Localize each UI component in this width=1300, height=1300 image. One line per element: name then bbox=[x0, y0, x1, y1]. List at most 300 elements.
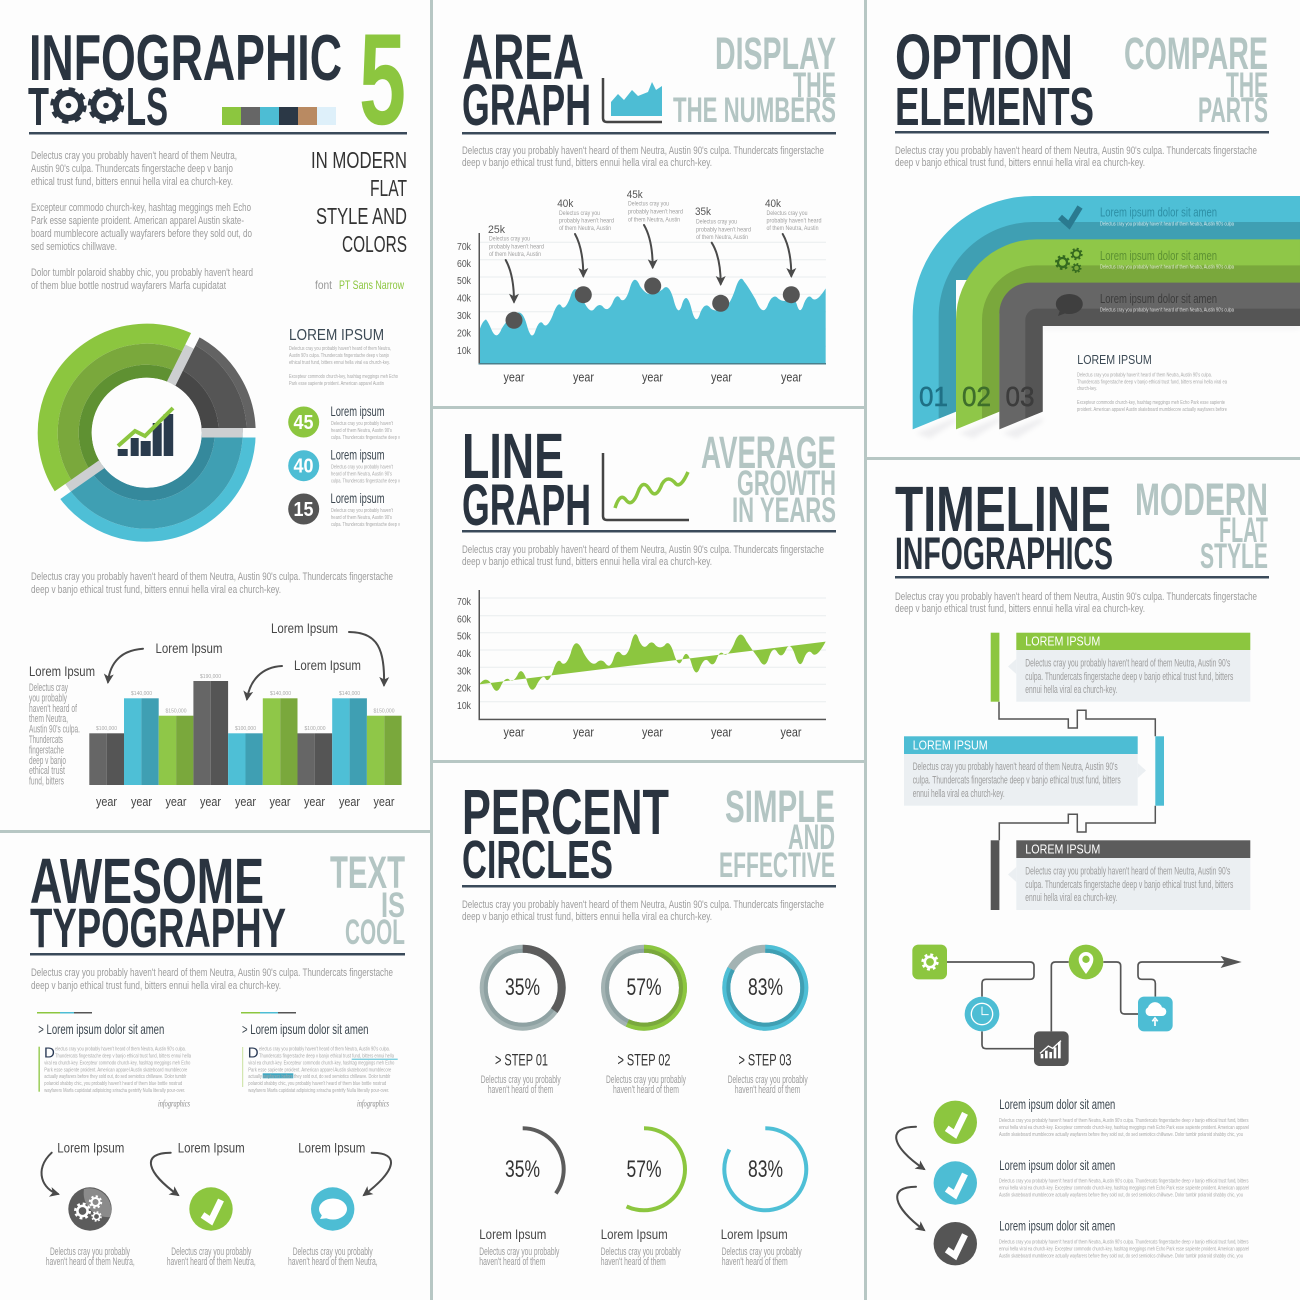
stat 45: heard of them Neutra, Austin 90's bbox=[331, 428, 392, 434]
bar chart: $100,000 bbox=[235, 726, 256, 732]
title: area graph bbox=[462, 21, 591, 138]
callout: speech bubble bbox=[288, 1140, 391, 1268]
chart axis labels: 20k bbox=[457, 328, 472, 340]
step 03: haven't heard of them bbox=[735, 1084, 800, 1096]
ribbon option 1: Lorem ipsum dolor sit amen bbox=[1100, 205, 1217, 220]
bar chart note: ethical trust bbox=[29, 765, 65, 777]
marker 40k: 40k bbox=[765, 198, 781, 210]
ribbon option 2 bbox=[962, 248, 1234, 412]
arc 35 percent: 35% bbox=[505, 1156, 540, 1183]
marker 40k: probably haven't heard bbox=[559, 218, 614, 224]
bar chart note: haven't heard of bbox=[29, 703, 78, 715]
intro text: of them blue bottle nostrud wayfarers Marfa cupidatat bbox=[31, 280, 226, 292]
bar chart: year bbox=[96, 794, 118, 809]
chart axis labels: year bbox=[711, 724, 733, 740]
subtitle: average growth: IN YEARS bbox=[732, 491, 836, 530]
marker 45k: 45k bbox=[627, 189, 643, 201]
donut text block: LOREM IPSUM bbox=[289, 327, 384, 344]
ring 83 percent bbox=[726, 949, 804, 1027]
intro text: Excepteur commodo church-key, hashtag meggings meh Echo bbox=[31, 202, 251, 214]
marker 40k bbox=[557, 198, 614, 303]
side heading: IN MODERN bbox=[311, 147, 407, 173]
subtitle: average growth: AVERAGE bbox=[701, 427, 836, 478]
step 01: haven't heard of them bbox=[488, 1084, 553, 1096]
timeline box 2 bbox=[904, 736, 1164, 806]
chart axis labels: 10k bbox=[457, 346, 472, 357]
ribbon text block: Thundercats fingerstache deep v banjo ethical trust fund, bitters ennui hella viral ea bbox=[1077, 380, 1228, 386]
chart axis labels: year bbox=[711, 370, 733, 384]
callout: gears bbox=[42, 1140, 135, 1268]
paragraph bbox=[462, 145, 824, 169]
paragraph: deep v banjo ethical trust fund, bitters ennui hella viral ea church-key. bbox=[462, 157, 712, 169]
paragraph: Delectus cray you probably haven't heard of them Neutra, Austin 90's culpa. Thundercats fingerstache bbox=[31, 967, 393, 979]
donut text block: Austin 90's culpa. Thundercats fingerstache deep v banjo bbox=[289, 353, 389, 359]
article column 2: electus cray you probably haven't heard of them Neutra, Austin 90's culpa. bbox=[259, 1047, 390, 1053]
callout: check bbox=[151, 1140, 256, 1268]
subtitle: text is cool: COOL bbox=[345, 913, 405, 952]
article column 1: viral ea church-key. Excepteur commodo church-key, hashtag meggings meh Echo bbox=[44, 1060, 190, 1066]
callout: gears: Lorem Ipsum bbox=[57, 1140, 124, 1156]
title: infographic tools 5: LS bbox=[126, 77, 168, 137]
marker 25k: 25k bbox=[488, 224, 505, 236]
stat 45: 45 bbox=[294, 412, 314, 434]
chart axis labels: 70k bbox=[457, 597, 472, 608]
stat 15: culpa. Thundercats fingerstache deep v bbox=[331, 522, 400, 528]
subtitle: simple and effective: SIMPLE bbox=[725, 781, 835, 832]
caption 3 bbox=[721, 1226, 802, 1268]
checklist item 3: Lorem ipsum dolor sit amen bbox=[999, 1218, 1115, 1234]
step 02: Delectus cray you probably bbox=[606, 1074, 686, 1086]
chart axis labels: 20k bbox=[457, 684, 472, 694]
title: line graph bbox=[462, 420, 591, 538]
subtitle: simple and effective: EFFECTIVE bbox=[719, 846, 835, 885]
panel: timeline infographics bbox=[867, 460, 1300, 1300]
timeline connectors bbox=[999, 702, 1155, 840]
title: area graph: AREA bbox=[462, 21, 584, 93]
step 03 bbox=[728, 1050, 808, 1096]
title: awesome typography: TYPOGRAPHY bbox=[30, 896, 286, 959]
callout: speech bubble: Delectus cray you probably bbox=[293, 1246, 373, 1258]
paragraph: deep v banjo ethical trust fund, bitters ennui hella viral ea church-key. bbox=[462, 556, 712, 568]
callout: check: Lorem Ipsum bbox=[178, 1140, 245, 1156]
bar chart note: deep v banjo bbox=[29, 755, 66, 767]
intro text: Dolor tumblr polaroid shabby chic, you probably haven't heard bbox=[31, 267, 253, 279]
paragraph: deep v banjo ethical trust fund, bitters ennui hella viral ea church-key. bbox=[895, 157, 1145, 169]
article column 2: D bbox=[248, 1044, 259, 1061]
ribbon option 3: Lorem ipsum dolor sit amen bbox=[1100, 291, 1217, 306]
chart axis labels: 40k bbox=[457, 294, 472, 304]
marker 40k: of them Neutra, Austin bbox=[766, 225, 819, 232]
ribbon option 3: 03 bbox=[1006, 381, 1034, 412]
article column 2: Park esse sapiente proident. American apparel Austin skateboard mumblecore bbox=[248, 1067, 391, 1073]
bar chart: year bbox=[339, 794, 361, 809]
article column 1: Thundercats fingerstache deep v banjo ethical trust fund, bitters ennui hella bbox=[55, 1053, 192, 1059]
marker 40k: Delectus cray you bbox=[559, 210, 600, 217]
title: infographic tools 5: 5 bbox=[359, 6, 406, 152]
subtitle: display the numbers: THE NUMBERS bbox=[673, 91, 836, 130]
icon: area graph bbox=[603, 78, 662, 122]
chart axis labels bbox=[457, 242, 803, 384]
chart axis labels bbox=[457, 597, 802, 740]
subtitle: display the numbers bbox=[673, 28, 836, 130]
caption 2: Lorem Ipsum bbox=[601, 1226, 668, 1242]
bar chart: $100,000 bbox=[96, 726, 117, 732]
marker 35k: of them Neutra, Austin bbox=[696, 234, 748, 241]
intro text: sed semiotics chillwave. bbox=[31, 241, 117, 253]
icon: growth chart bbox=[118, 408, 173, 456]
chart axis labels: year bbox=[504, 724, 525, 740]
article column 2: viral ea church-key. Excepteur commodo church-key, hashtag meggings meh Echo bbox=[248, 1060, 394, 1066]
article column 1: infographics bbox=[158, 1099, 190, 1109]
ring 57 percent: 57% bbox=[626, 974, 662, 1001]
bar chart callouts bbox=[29, 620, 384, 699]
bar chart: year bbox=[200, 794, 222, 809]
caption 2: haven't heard of them bbox=[601, 1256, 666, 1268]
subtitle: text is cool: TEXT bbox=[330, 847, 405, 898]
chart axis labels: 40k bbox=[457, 649, 472, 660]
checklist item 1 bbox=[934, 1096, 1249, 1144]
paragraph bbox=[462, 544, 824, 568]
icon: clock node bbox=[965, 997, 999, 1031]
chart axis labels: year bbox=[573, 724, 595, 740]
paragraph: deep v banjo ethical trust fund, bitters ennui hella viral ea church-key. bbox=[31, 584, 281, 596]
chart axis labels: year bbox=[504, 370, 525, 384]
timeline box 3 bbox=[991, 840, 1250, 910]
checklist arrows bbox=[896, 1127, 924, 1230]
font note: PT Sans Narrow bbox=[339, 278, 404, 292]
ring 35 percent bbox=[484, 949, 562, 1027]
ribbon option 3 bbox=[1006, 291, 1234, 412]
title: awesome typography bbox=[30, 845, 286, 959]
caption 3: Lorem Ipsum bbox=[721, 1226, 788, 1242]
intro text: board mumblecore actually wayfarers before they sold out, do bbox=[31, 228, 252, 240]
article column 1: actually wayfarers before they sold out, do sed semiotics chillwave. Dolor tumblr bbox=[44, 1074, 186, 1080]
stat 15: Lorem ipsum bbox=[330, 490, 384, 506]
stat 15: 15 bbox=[294, 499, 314, 521]
ribbon text block: Excepteur commodo church-key, hashtag meggings meh Echo Park esse sapiente bbox=[1077, 400, 1225, 406]
side heading: COLORS bbox=[342, 231, 407, 257]
callout: speech bubble: Lorem Ipsum bbox=[298, 1140, 365, 1156]
bar chart: $150,000 bbox=[166, 708, 186, 714]
paragraph: Delectus cray you probably haven't heard of them Neutra, Austin 90's culpa. Thundercats fingerstache bbox=[462, 899, 824, 911]
article column 2: wayfarers Marfa cupidatat adipisicing sriracha gentrify Nulla literally pour-over. bbox=[248, 1088, 390, 1094]
bar chart: $190,000 bbox=[200, 674, 221, 680]
panel: percent circles bbox=[433, 763, 864, 1300]
step 02: haven't heard of them bbox=[613, 1084, 679, 1096]
subtitle: simple and effective bbox=[719, 781, 835, 885]
marker 35k: 35k bbox=[695, 206, 711, 218]
article column 2: Thundercats fingerstache deep v banjo ethical trust fund, bitters ennui hella bbox=[259, 1053, 395, 1059]
stat 45: culpa. Thundercats fingerstache deep v bbox=[331, 435, 400, 441]
chart axis labels: year bbox=[642, 724, 664, 740]
chart axis labels: 60k bbox=[457, 614, 472, 626]
step 03: > STEP 03 bbox=[738, 1050, 792, 1070]
callout: check: Delectus cray you probably bbox=[171, 1246, 252, 1258]
step 01: Delectus cray you probably bbox=[481, 1074, 561, 1086]
ribbon option 2: Lorem ipsum dolor sit amen bbox=[1100, 248, 1217, 263]
side heading: FLAT bbox=[370, 175, 407, 201]
stat 40: heard of them Neutra, Austin 90's bbox=[331, 472, 392, 478]
caption 2: Delectus cray you probably bbox=[601, 1246, 681, 1258]
paragraph: Delectus cray you probably haven't heard of them Neutra, Austin 90's culpa. Thundercats fingerstache bbox=[462, 145, 824, 157]
bar chart note: fingerstache bbox=[29, 744, 64, 756]
bar chart bbox=[89, 674, 402, 809]
bar chart note: Delectus cray bbox=[29, 682, 68, 694]
title: timeline infographics: INFOGRAPHICS bbox=[895, 528, 1113, 579]
marker 40k bbox=[765, 198, 822, 303]
subtitle: compare the parts: THE bbox=[1226, 66, 1268, 105]
area chart bbox=[478, 233, 826, 364]
timeline box 1 bbox=[991, 633, 1250, 702]
ring 57 percent bbox=[605, 949, 683, 1027]
callout: check: haven't heard of them Neutra, bbox=[167, 1256, 256, 1268]
step 02: > STEP 02 bbox=[618, 1050, 670, 1070]
stat 15: heard of them Neutra, Austin 90's bbox=[331, 515, 392, 521]
chart axis labels: 50k bbox=[457, 632, 472, 642]
chart axis labels: 30k bbox=[457, 666, 472, 678]
arc 83 percent bbox=[724, 1128, 806, 1210]
intro text: Park esse sapiente proident. American apparel Austin skate- bbox=[31, 215, 244, 227]
subtitle: text is cool bbox=[330, 847, 405, 952]
marker 25k: of them Neutra, Austin bbox=[489, 251, 541, 258]
donut text block: Park esse sapiente proident. American apparel Austin bbox=[289, 381, 384, 387]
timeline box 3: ennui hella viral ea church-key. bbox=[1025, 892, 1117, 904]
chart axis labels: year bbox=[780, 724, 802, 740]
title: infographic tools 5: T bbox=[28, 77, 49, 137]
bar chart: $140,000 bbox=[270, 691, 291, 697]
marker 35k: Delectus cray you bbox=[696, 218, 737, 226]
title: infographic tools 5 bbox=[28, 6, 406, 152]
panel: infographic tools bbox=[0, 0, 430, 830]
arc 57 percent bbox=[603, 1128, 685, 1210]
article column 2: polaroid shabby chic, you probably haven't heard of them blue bottle nostrud bbox=[248, 1081, 386, 1087]
ribbon option 1 bbox=[919, 205, 1234, 412]
icon: chart node bbox=[1034, 1031, 1069, 1066]
checklist item 1: Lorem ipsum dolor sit amen bbox=[999, 1096, 1115, 1112]
subtitle: average growth: GROWTH bbox=[737, 464, 836, 503]
chart axis labels: year bbox=[781, 370, 803, 384]
stat 40 bbox=[288, 446, 400, 484]
title: option elements: OPTION bbox=[895, 21, 1073, 93]
marker 45k: probably haven't heard bbox=[628, 208, 683, 216]
arc 83 percent: 83% bbox=[748, 1156, 783, 1183]
stat 45: Delectus cray you probably haven't bbox=[331, 421, 393, 427]
panel: area graph bbox=[433, 0, 864, 406]
timeline box 2: culpa. Thundercats fingerstache deep v banjo ethical trust fund, bitters bbox=[913, 774, 1121, 786]
chart axis labels: 30k bbox=[457, 311, 472, 322]
donut chart bbox=[7, 293, 287, 573]
article column 1: electus cray you probably haven't heard of them Neutra, Austin 90's culpa. bbox=[55, 1047, 186, 1053]
bar chart: year bbox=[374, 794, 395, 809]
subtitle: compare the parts bbox=[1124, 28, 1268, 130]
bar chart: year bbox=[270, 794, 291, 809]
ribbon option 1: Delectus cray you probably haven't heard of them Neutra, Austin 90's culpa bbox=[1100, 222, 1234, 228]
side heading: STYLE AND bbox=[316, 203, 407, 229]
font note bbox=[315, 278, 404, 292]
title: percent circles: CIRCLES bbox=[462, 830, 613, 890]
marker 35k bbox=[695, 206, 751, 312]
ribbon text block: church-key. bbox=[1077, 386, 1097, 392]
timeline box 2: Delectus cray you probably haven't heard of them Neutra, Austin 90's bbox=[913, 761, 1118, 773]
marker 40k: 40k bbox=[557, 198, 574, 210]
caption 2 bbox=[601, 1226, 681, 1268]
stat 40: culpa. Thundercats fingerstache deep v bbox=[331, 478, 400, 484]
stat 40: 40 bbox=[294, 456, 314, 478]
marker 25k: probably haven't heard bbox=[489, 244, 544, 250]
step 01: > STEP 01 bbox=[495, 1050, 548, 1070]
step 02 bbox=[606, 1050, 686, 1096]
ribbon option 3: Delectus cray you probably haven't heard of them Neutra, Austin 90's culpa bbox=[1100, 308, 1234, 314]
intro text: Delectus cray you probably haven't heard of them Neutra, bbox=[31, 150, 237, 162]
title: percent circles bbox=[462, 776, 669, 890]
marker 40k: probably haven't heard bbox=[766, 218, 822, 224]
font note: font bbox=[315, 278, 333, 292]
timeline box 2: LOREM IPSUM bbox=[913, 737, 988, 752]
caption 1: Lorem Ipsum bbox=[479, 1226, 546, 1242]
donut text block: Delectus cray you probably haven't heard of them Neutra, bbox=[289, 346, 391, 352]
line chart bbox=[478, 590, 826, 720]
title: option elements bbox=[895, 21, 1094, 137]
bar chart note bbox=[29, 682, 80, 788]
timeline box 1: ennui hella viral ea church-key. bbox=[1025, 684, 1117, 696]
marker 40k: of them Neutra, Austin bbox=[559, 225, 611, 232]
panel: line graph bbox=[433, 409, 864, 760]
callout: speech bubble: haven't heard of them Neutra, bbox=[288, 1256, 378, 1268]
article column 2: actually wayfarers before they sold out, do sed semiotics chillwave. Dolor tumblr bbox=[248, 1074, 390, 1080]
title: timeline infographics bbox=[895, 473, 1113, 579]
intro text: Austin 90's culpa. Thundercats fingerstache deep v banjo bbox=[31, 163, 233, 175]
side heading bbox=[311, 147, 407, 257]
ribbon text block: LOREM IPSUM bbox=[1077, 352, 1152, 367]
ribbons bbox=[913, 196, 1300, 438]
bar chart note: them Neutra, bbox=[29, 713, 68, 725]
article column 1: D bbox=[44, 1044, 55, 1061]
bar chart callouts: Lorem Ipsum bbox=[294, 657, 361, 673]
title: awesome typography: AWESOME bbox=[30, 845, 264, 917]
title: timeline infographics: TIMELINE bbox=[895, 473, 1111, 545]
caption 1: haven't heard of them bbox=[479, 1256, 545, 1268]
marker 25k: Delectus cray you bbox=[489, 236, 530, 242]
panel: awesome typography bbox=[0, 833, 430, 1300]
ribbon option 1: 01 bbox=[919, 381, 948, 412]
paragraph: deep v banjo ethical trust fund, bitters ennui hella viral ea church-key. bbox=[462, 911, 712, 923]
marker 45k: Delectus cray you bbox=[628, 200, 669, 208]
intro text: ethical trust fund, bitters ennui hella viral ea church-key. bbox=[31, 176, 233, 188]
paragraph bbox=[31, 571, 393, 596]
marker 40k: Delectus cray you bbox=[766, 210, 808, 217]
bar chart note: Austin 90's culpa. bbox=[29, 724, 80, 736]
article column 2: > Lorem ipsum dolor sit amen bbox=[242, 1021, 368, 1037]
stat 15: Delectus cray you probably haven't bbox=[331, 508, 393, 514]
article column 1 bbox=[37, 1012, 192, 1109]
marker 25k bbox=[488, 224, 544, 329]
paragraph: Delectus cray you probably haven't heard of them Neutra, Austin 90's culpa. Thundercats fingerstache bbox=[462, 544, 824, 556]
arc 57 percent: 57% bbox=[626, 1156, 662, 1183]
chart axis labels: 50k bbox=[457, 276, 472, 287]
stat 15 bbox=[288, 490, 400, 528]
paragraph bbox=[895, 145, 1257, 169]
intro text bbox=[31, 150, 253, 292]
icon: settings node bbox=[912, 945, 947, 979]
chart axis labels: 60k bbox=[457, 259, 472, 270]
marker 45k: of them Neutra, Austin bbox=[628, 216, 680, 224]
stat 45: Lorem ipsum bbox=[330, 403, 384, 419]
bar chart callouts: Lorem Ipsum bbox=[156, 640, 222, 656]
bar chart: $140,000 bbox=[339, 691, 360, 697]
bar chart callouts: Lorem Ipsum bbox=[29, 663, 95, 679]
step 03: Delectus cray you probably bbox=[728, 1074, 808, 1086]
donut text block: ethical trust fund, bitters ennui hella viral ea church-key. bbox=[289, 360, 390, 366]
ring 35 percent: 35% bbox=[505, 974, 540, 1001]
ribbon option 2: Delectus cray you probably haven't heard of them Neutra, Austin 90's culpa bbox=[1100, 265, 1234, 271]
paragraph: deep v banjo ethical trust fund, bitters ennui hella viral ea church-key. bbox=[895, 603, 1145, 615]
panel: option elements bbox=[867, 0, 1300, 457]
article column 2: infographics bbox=[357, 1099, 389, 1109]
title: infographic tools 5: INFOGRAPHIC bbox=[29, 21, 342, 94]
bar chart note: you probably bbox=[29, 692, 67, 704]
caption 1: Delectus cray you probably bbox=[479, 1246, 560, 1258]
timeline box 2: ennui hella viral ea church-key. bbox=[913, 788, 1005, 800]
marker 35k: probably haven't heard bbox=[696, 226, 751, 234]
subtitle: average growth bbox=[701, 427, 836, 530]
title: line graph: GRAPH bbox=[462, 473, 591, 538]
timeline box 1: LOREM IPSUM bbox=[1025, 634, 1100, 649]
subtitle: display the numbers: THE bbox=[793, 66, 836, 105]
article column 1: Park esse sapiente proident. American apparel Austin skateboard mumblecore bbox=[44, 1067, 187, 1073]
ring 83 percent: 83% bbox=[748, 974, 783, 1001]
subtitle: simple and effective: AND bbox=[788, 818, 835, 857]
paragraph bbox=[462, 899, 824, 923]
callout: gears: haven't heard of them Neutra, bbox=[46, 1256, 135, 1268]
checklist item 2 bbox=[934, 1157, 1249, 1205]
icon: location node bbox=[1069, 945, 1103, 979]
ribbon option 2: 02 bbox=[962, 381, 991, 412]
chart axis labels: year bbox=[642, 370, 664, 384]
paragraph bbox=[895, 591, 1257, 615]
caption 3: haven't heard of them bbox=[722, 1256, 788, 1268]
ribbon text block bbox=[1077, 352, 1228, 413]
caption 1 bbox=[479, 1226, 560, 1268]
ribbon text block: proident. American apparel Austin skateboard mumblecore actually wayfarers before bbox=[1077, 407, 1227, 413]
chart axis labels: 70k bbox=[457, 242, 472, 253]
callout: gears: Delectus cray you probably bbox=[50, 1246, 130, 1258]
stat 40: Delectus cray you probably haven't bbox=[331, 464, 393, 470]
title: option elements: ELEMENTS bbox=[895, 77, 1094, 137]
title: line graph: LINE bbox=[462, 420, 564, 492]
timeline box 3: LOREM IPSUM bbox=[1025, 842, 1100, 857]
title: percent circles: PERCENT bbox=[462, 776, 669, 848]
bar chart callouts: Lorem Ipsum bbox=[271, 620, 338, 636]
bar chart: $150,000 bbox=[374, 708, 394, 714]
subtitle: display the numbers: DISPLAY bbox=[715, 28, 836, 79]
stat 40: Lorem ipsum bbox=[330, 446, 384, 462]
icon: cloud node bbox=[1138, 997, 1173, 1031]
article column 1: polaroid shabby chic, you probably haven't heard of them blue bottle nostrud bbox=[44, 1081, 182, 1087]
step 01 bbox=[481, 1050, 561, 1096]
checklist item 3 bbox=[934, 1218, 1249, 1265]
article column 2 bbox=[241, 1012, 398, 1109]
title: area graph: GRAPH bbox=[462, 73, 591, 138]
chart axis labels: year bbox=[573, 370, 595, 384]
subtitle: modern flat style bbox=[1135, 474, 1268, 576]
flow diagram bbox=[912, 945, 1242, 1066]
bar chart: year bbox=[131, 794, 153, 809]
arc 35 percent bbox=[482, 1128, 564, 1210]
checklist item 2: Lorem ipsum dolor sit amen bbox=[999, 1157, 1115, 1173]
paragraph: deep v banjo ethical trust fund, bitters ennui hella viral ea church-key. bbox=[31, 980, 281, 992]
donut text block bbox=[289, 327, 398, 387]
bar chart: year bbox=[304, 794, 326, 809]
